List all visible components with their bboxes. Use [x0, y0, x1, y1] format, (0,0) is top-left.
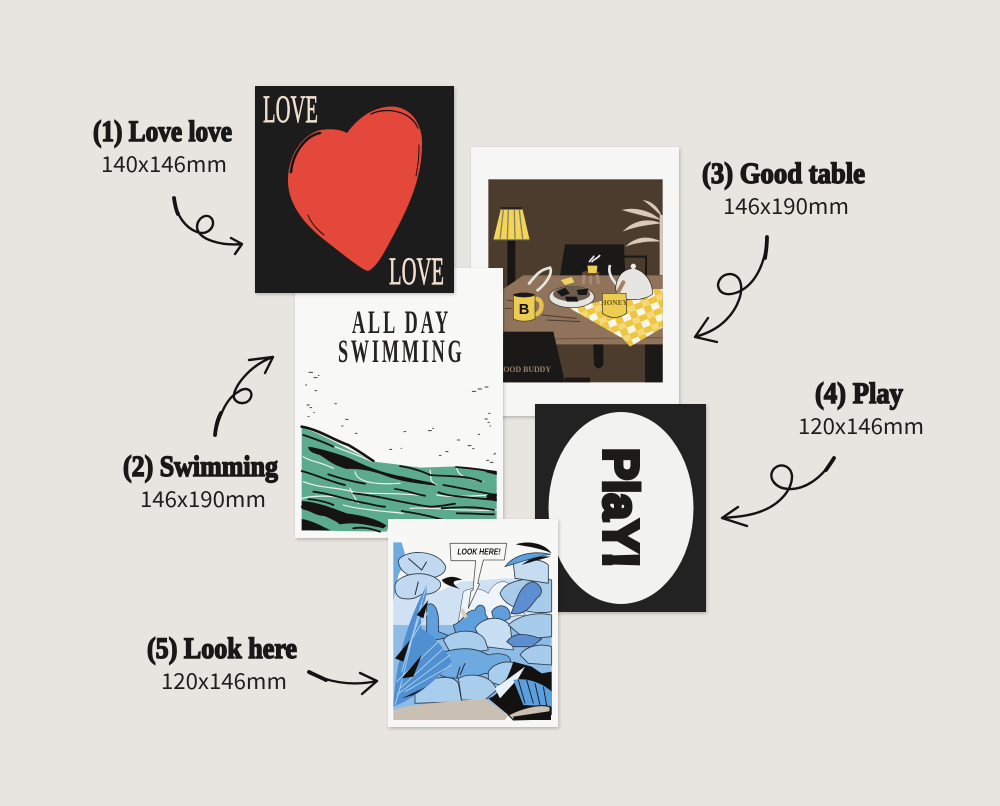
icon: butter — [561, 277, 574, 285]
front chair with label — [503, 332, 590, 382]
title: All day swimming: ALL DAY — [352, 303, 448, 340]
text: LOVE top: LOVE — [263, 88, 318, 131]
illustration: waves and birds — [302, 372, 497, 532]
panel: card 3 Good table — [471, 147, 679, 416]
feather top right — [505, 553, 551, 567]
water — [302, 428, 497, 532]
trees — [395, 552, 552, 703]
label 2: Swimming — [123, 450, 278, 514]
icon: plant — [622, 200, 663, 275]
arrow 4 — [722, 458, 834, 526]
label 1: Love love: (1) Love love — [93, 115, 232, 148]
title: All day swimming — [338, 303, 462, 369]
label 4: Play — [798, 377, 924, 441]
panel: card 5 Look here — [388, 519, 558, 727]
icon: honey jar: HONEY — [601, 298, 628, 307]
arrow 5 — [309, 672, 377, 694]
title: All day swimming: SWIMMING — [338, 332, 462, 369]
icon: teapot — [609, 257, 652, 300]
table top — [503, 275, 663, 344]
text: LOVE bottom: LOVE — [389, 250, 444, 293]
illustration: table scene — [488, 179, 663, 382]
birds — [306, 372, 495, 462]
speech bubble: LOOK HERE! — [457, 547, 501, 556]
label 5: Look here: (5) Look here — [147, 632, 297, 665]
label 5: Look here: 120x146mm — [161, 665, 287, 696]
oval — [548, 412, 694, 604]
icon: checked tablecloth — [570, 289, 663, 347]
arrow 2 — [215, 357, 273, 435]
arrow 1 — [174, 198, 242, 254]
label 5: Look here — [147, 632, 297, 696]
icon: honey jar — [601, 282, 628, 317]
label 3: Good table — [702, 157, 865, 221]
label 4: Play: 120x146mm — [798, 410, 924, 441]
chair back — [560, 244, 625, 276]
icon: B mug: B — [519, 302, 529, 318]
label 3: Good table: (3) Good table — [702, 157, 865, 190]
panel: card 2 Swimming — [295, 268, 503, 538]
label 2: Swimming: 146x190mm — [140, 483, 266, 514]
black shapes — [442, 577, 462, 589]
panel: card 4 Play — [535, 404, 706, 612]
white wave lines — [302, 447, 497, 513]
ground — [393, 698, 508, 720]
steam — [528, 268, 551, 291]
front chair with label: OOD BUDDY — [503, 365, 551, 374]
icon: lamp — [493, 208, 530, 287]
blue slats — [513, 679, 552, 707]
label 3: Good table: 146x190mm — [723, 190, 849, 221]
icon: plate of food — [549, 286, 594, 308]
illustration: blue forest — [393, 542, 552, 720]
table legs — [593, 344, 603, 368]
label 4: Play: (4) Play — [815, 377, 903, 410]
fern — [393, 585, 452, 707]
black wave shapes — [302, 427, 373, 461]
text: Play!: PlaY! — [593, 448, 647, 568]
sky clouds — [458, 582, 525, 622]
arrow 3 — [695, 237, 767, 342]
label 2: Swimming: (2) Swimming — [123, 450, 278, 483]
speech bubble — [450, 543, 507, 608]
icon: red heart — [288, 106, 422, 271]
icon: B mug — [513, 293, 542, 321]
panel: card 1 Love love — [255, 86, 454, 293]
label 1: Love love: 140x146mm — [101, 148, 227, 179]
icon: stool and cup — [582, 255, 600, 284]
label 1: Love love — [93, 115, 232, 179]
